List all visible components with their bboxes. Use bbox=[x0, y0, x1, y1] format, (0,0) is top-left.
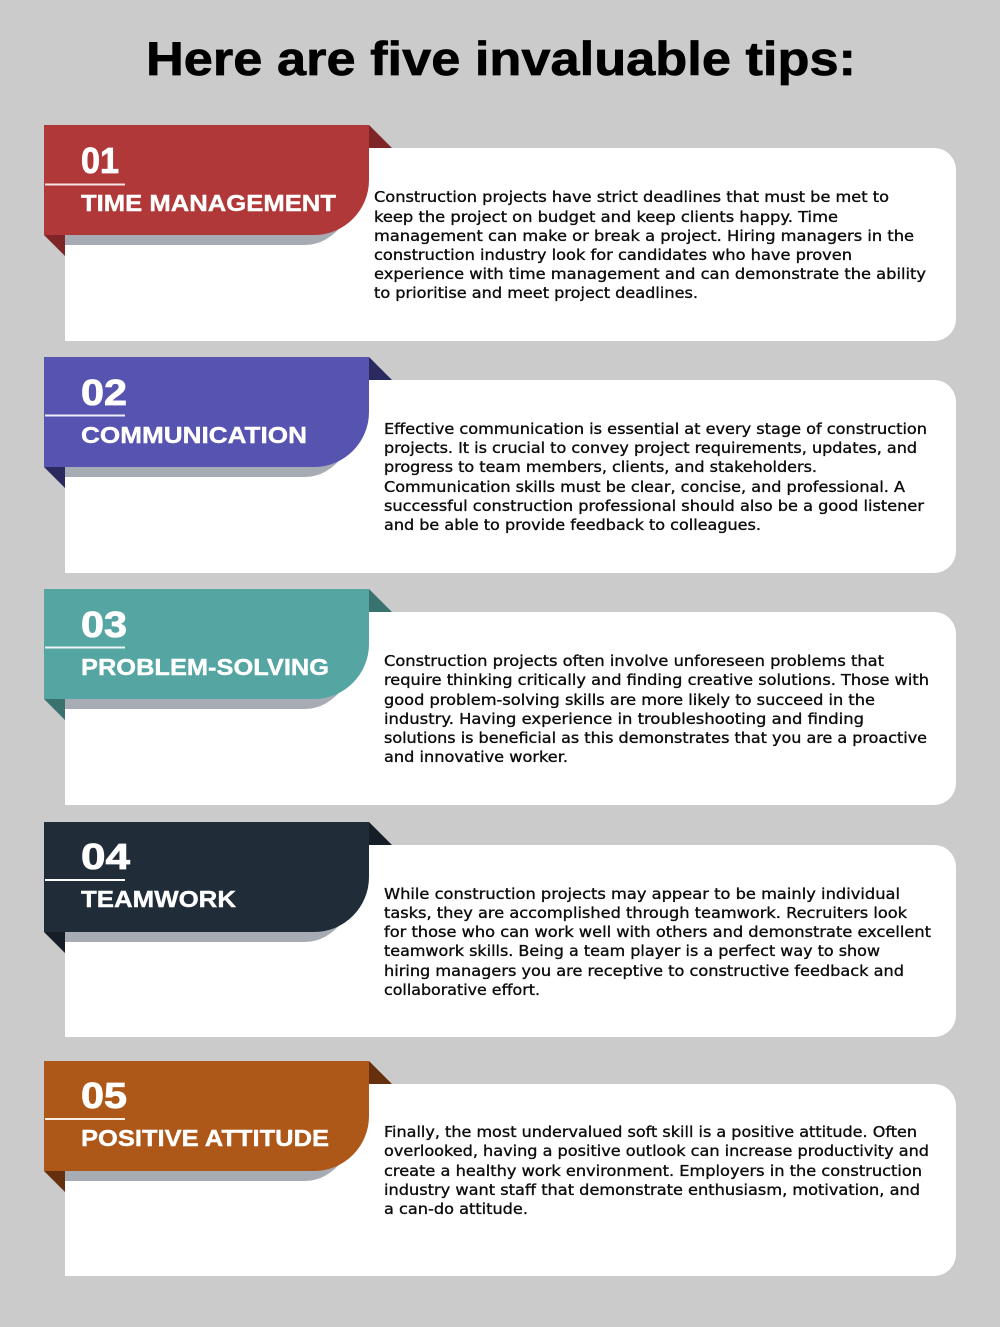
body text: construction industry look for candidates who have proven bbox=[374, 246, 852, 264]
body text: and be able to provide feedback to colleagues. bbox=[384, 516, 761, 534]
ribbon fold bottom bbox=[44, 235, 65, 256]
body text: industry. Having experience in troubleshooting and finding bbox=[384, 710, 864, 728]
ribbon bbox=[44, 357, 369, 467]
ribbon shadow bbox=[65, 432, 345, 477]
body text: While construction projects may appear to be mainly individual bbox=[384, 885, 900, 903]
body text: Finally, the most undervalued soft skill is a positive attitude. Often bbox=[384, 1123, 917, 1141]
text card bbox=[65, 845, 956, 1037]
panel: communication bbox=[44, 357, 956, 573]
number: 03 bbox=[81, 604, 127, 645]
body text: Construction projects often involve unforeseen problems that bbox=[384, 652, 884, 670]
panel: problem-solving bbox=[44, 589, 956, 805]
body text: progress to team members, clients, and stakeholders. bbox=[384, 458, 817, 476]
body text: Communication skills must be clear, concise, and professional. A bbox=[384, 478, 906, 496]
body text: a can-do attitude. bbox=[384, 1200, 528, 1218]
ribbon shadow bbox=[65, 1136, 345, 1181]
body text bbox=[374, 188, 926, 302]
ribbon bbox=[44, 822, 369, 932]
body text: projects. It is crucial to convey project requirements, updates, and bbox=[384, 439, 917, 457]
number underline bbox=[45, 1118, 125, 1120]
body text: experience with time management and can demonstrate the ability bbox=[374, 265, 926, 283]
ribbon bbox=[44, 589, 369, 699]
body text: teamwork skills. Being a team player is a perfect way to show bbox=[384, 942, 880, 960]
text card bbox=[65, 148, 956, 341]
panel: time management bbox=[44, 125, 956, 341]
panel: teamwork bbox=[44, 822, 956, 1037]
body text: Effective communication is essential at every stage of construction bbox=[384, 420, 927, 438]
body text: Construction projects have strict deadlines that must be met to bbox=[374, 188, 889, 206]
heading: POSITIVE ATTITUDE bbox=[81, 1125, 329, 1151]
number underline bbox=[45, 184, 125, 186]
ribbon fold bottom bbox=[44, 467, 65, 488]
number underline bbox=[45, 879, 125, 881]
body text: create a healthy work environment. Employers in the construction bbox=[384, 1162, 922, 1180]
body text: require thinking critically and finding creative solutions. Those with bbox=[384, 671, 929, 689]
number: 02 bbox=[81, 372, 127, 413]
body text bbox=[384, 1123, 929, 1218]
text card bbox=[65, 1084, 956, 1276]
number underline bbox=[45, 646, 125, 648]
number: 01 bbox=[81, 140, 119, 181]
ribbon fold bottom bbox=[44, 1171, 65, 1192]
body text: keep the project on budget and keep clients happy. Time bbox=[374, 208, 838, 226]
text card bbox=[65, 612, 956, 805]
body text: to prioritise and meet project deadlines. bbox=[374, 284, 698, 302]
body text bbox=[384, 885, 931, 999]
ribbon shadow bbox=[65, 897, 345, 942]
ribbon fold top bbox=[369, 822, 392, 845]
number: 05 bbox=[81, 1075, 127, 1116]
body text: industry want staff that demonstrate enthusiasm, motivation, and bbox=[384, 1181, 920, 1199]
heading: PROBLEM-SOLVING bbox=[81, 654, 329, 680]
heading: TIME MANAGEMENT bbox=[81, 190, 337, 216]
body text: successful construction professional should also be a good listener bbox=[384, 497, 925, 515]
body text: tasks, they are accomplished through teamwork. Recruiters look bbox=[384, 904, 907, 922]
ribbon fold top bbox=[369, 1061, 392, 1084]
heading: TEAMWORK bbox=[81, 886, 236, 912]
heading: COMMUNICATION bbox=[81, 422, 307, 448]
body text: collaborative effort. bbox=[384, 981, 540, 999]
ribbon shadow bbox=[65, 664, 345, 709]
ribbon bbox=[44, 1061, 369, 1171]
body text bbox=[384, 420, 927, 534]
ribbon bbox=[44, 125, 369, 235]
ribbon fold bottom bbox=[44, 699, 65, 720]
body text: solutions is beneficial as this demonstrates that you are a proactive bbox=[384, 729, 927, 747]
body text: for those who can work well with others and demonstrate excellent bbox=[384, 923, 931, 941]
ribbon shadow bbox=[65, 200, 345, 245]
panel: positive attitude bbox=[44, 1061, 956, 1276]
body text: management can make or break a project. Hiring managers in the bbox=[374, 227, 914, 245]
body text: hiring managers you are receptive to constructive feedback and bbox=[384, 962, 904, 980]
title: Here are five invaluable tips: bbox=[146, 32, 856, 85]
number: 04 bbox=[81, 836, 130, 877]
number underline bbox=[45, 414, 125, 416]
body text bbox=[384, 652, 929, 766]
body text: overlooked, having a positive outlook can increase productivity and bbox=[384, 1142, 929, 1160]
body text: and innovative worker. bbox=[384, 748, 568, 766]
ribbon fold top bbox=[369, 125, 392, 148]
ribbon fold bottom bbox=[44, 932, 65, 953]
ribbon fold top bbox=[369, 589, 392, 612]
body text: good problem-solving skills are more likely to succeed in the bbox=[384, 691, 875, 709]
ribbon fold top bbox=[369, 357, 392, 380]
text card bbox=[65, 380, 956, 573]
